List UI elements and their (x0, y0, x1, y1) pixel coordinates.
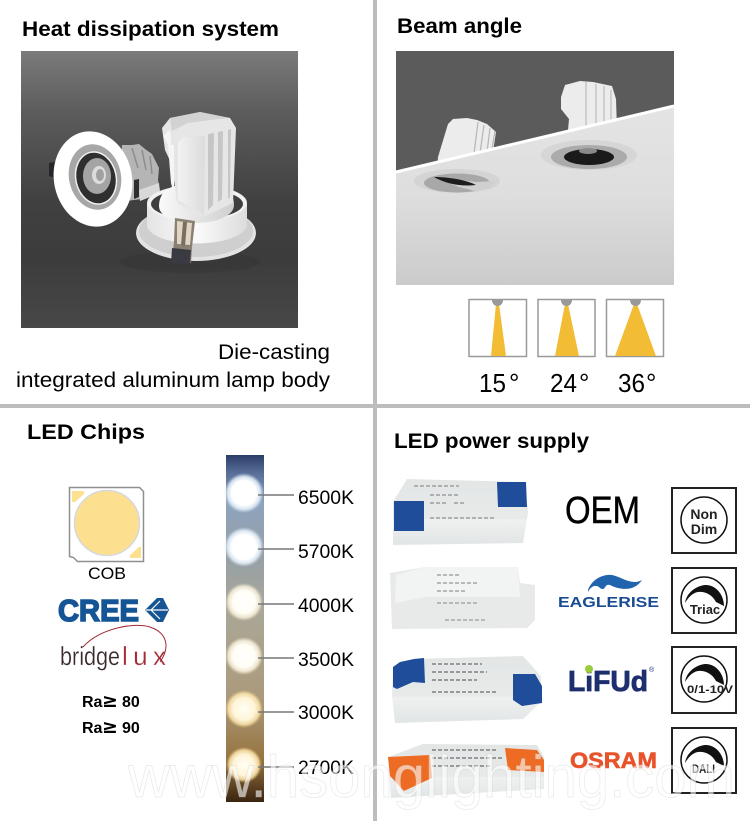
icon: DALI: DALI (692, 762, 715, 776)
driver 4 (388, 744, 544, 798)
panel: heat dissipation system (16, 18, 331, 392)
COB chip icon: COB (88, 565, 126, 583)
colour rendering index labels: 90 (122, 720, 140, 737)
beam angle labels: ° (646, 368, 656, 398)
logo: Eaglerise (558, 575, 659, 611)
beam 15 degrees (469, 300, 526, 356)
logo: bridgelux: bridge (60, 641, 120, 671)
colour rendering index labels: Ra (82, 720, 103, 737)
colour rendering index labels: ≥ (102, 716, 118, 738)
watermark: www.hsonglighting.com (127, 744, 735, 810)
colour rendering index labels: 80 (122, 694, 140, 711)
heading: heat dissipation system: Heat dissipation system (22, 18, 279, 41)
logo: Eaglerise: EAGLERISE (558, 594, 659, 611)
icon: triac (672, 568, 736, 633)
logo: Lifud: LiFUd (568, 666, 648, 698)
photo: die-cast lamps on dark background (21, 51, 298, 328)
icon: non dim: Non (690, 506, 718, 522)
icon: non dim (672, 488, 736, 553)
beam angle labels: ° (509, 368, 519, 398)
heading: beam angle: Beam angle (397, 15, 522, 38)
logo: Osram: OSRAM (570, 748, 657, 773)
heading: LED chips: LED Chips (27, 421, 145, 444)
beam angle labels: ° (579, 368, 589, 398)
front lamp trim (136, 205, 256, 261)
icon: 0/1-10V: 0/1-10V (687, 684, 734, 696)
LED strip colour temperatures: 6500K (298, 488, 354, 509)
photo: recessed lamps in ceiling (396, 51, 674, 285)
LED strip colour temperatures: 3500K (298, 650, 354, 671)
logo: OEM: OEM (565, 490, 640, 532)
left lamp fins (437, 118, 496, 171)
colour rendering index labels (82, 690, 140, 738)
beam 36 degrees (606, 300, 664, 356)
icon: non dim: Dim (691, 521, 717, 537)
beam angle labels: 24 (550, 368, 577, 398)
left downlight (414, 169, 500, 193)
beam angle labels: 15 (479, 368, 506, 398)
colour rendering index labels: Ra (82, 694, 103, 711)
caption: die-casting integrated aluminum lamp body: integrated aluminum lamp body (16, 369, 331, 392)
LED strip colour temperatures (224, 455, 354, 802)
LED strip colour temperatures: 3000K (298, 703, 354, 724)
LED strip colour temperatures: 4000K (298, 596, 354, 617)
logo: bridgelux: lux (122, 641, 166, 671)
COB chip icon (70, 488, 144, 583)
caption: die-casting integrated aluminum lamp body (16, 341, 331, 392)
driver 1 (393, 479, 528, 545)
beam angle labels: 36 (618, 368, 645, 398)
panel: LED chips (27, 421, 354, 802)
beam angle labels (479, 368, 656, 398)
logo: bridgelux (60, 625, 166, 671)
front lamp fins (162, 112, 236, 217)
LED strip colour temperatures: 2700K (298, 758, 354, 779)
LED strip colour temperatures: 5700K (298, 542, 354, 563)
driver 2 (390, 567, 535, 629)
right lamp fins (561, 81, 617, 141)
icon: triac: Triac (690, 602, 720, 617)
panel: LED power supply (388, 430, 736, 798)
colour rendering index labels: ≥ (102, 690, 118, 712)
caption: die-casting integrated aluminum lamp body: Die-casting (218, 341, 330, 364)
heading: LED power supply: LED power supply (394, 430, 589, 453)
icon: DALI (672, 728, 736, 793)
icon: 0/1-10V (672, 647, 736, 713)
beam 24 degrees (538, 300, 595, 356)
spring clip (172, 218, 195, 263)
rear lamp heat sink (120, 144, 160, 201)
panel: beam angle (396, 15, 674, 398)
logo: CREE: CREE (58, 593, 139, 628)
logo: Lifud: ® (649, 666, 655, 674)
driver 3 (392, 656, 542, 723)
beam diagrams (469, 300, 664, 356)
right downlight (541, 140, 637, 170)
